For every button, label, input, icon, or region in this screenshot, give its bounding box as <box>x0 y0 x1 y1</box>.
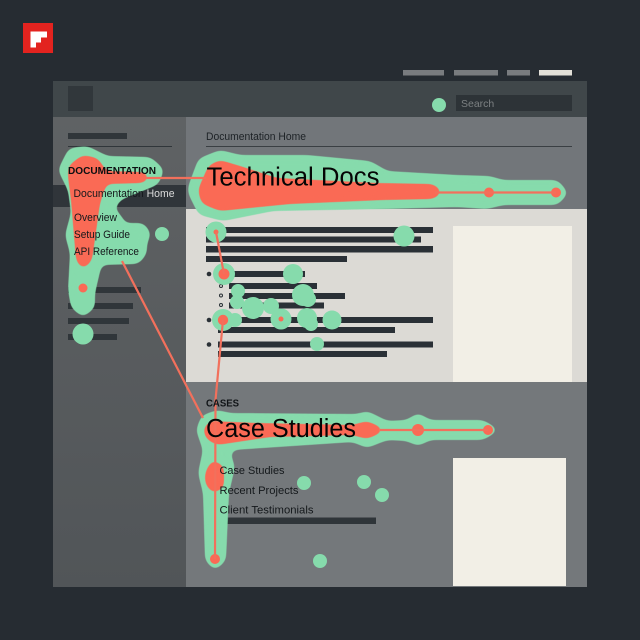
sidebar placeholder bars <box>68 133 172 340</box>
label: cases: CASES <box>206 398 239 410</box>
icon: flipboard logo <box>23 23 53 53</box>
search box <box>456 95 572 111</box>
cases links: Recent Projects <box>220 485 299 497</box>
header bar <box>53 81 587 117</box>
top navigation bars <box>403 70 572 76</box>
breadcrumb: Documentation Home <box>206 131 306 143</box>
content panel <box>186 209 587 382</box>
sidebar labels: API Reference <box>74 246 139 258</box>
heading: case studies: Case Studies <box>206 415 356 443</box>
cases links: Case Studies <box>220 465 285 477</box>
sidebar active band <box>53 185 186 207</box>
sidebar labels: Documentation Home <box>74 188 174 200</box>
sidebar labels <box>68 165 174 258</box>
heading: technical docs: Technical Docs <box>206 164 380 192</box>
body text bars <box>206 227 433 357</box>
site logo placeholder <box>68 86 93 111</box>
sidebar labels: Overview <box>74 212 117 224</box>
heatmap red hot zones <box>70 157 561 564</box>
cases links: Client Testimonials <box>220 504 314 516</box>
main hero panel <box>186 117 587 209</box>
cases image placeholder <box>453 458 566 586</box>
search box: Search <box>461 98 494 110</box>
sidebar labels: DOCUMENTATION <box>68 165 156 177</box>
cases bar <box>220 518 376 524</box>
website window <box>53 81 587 587</box>
sidebar panel <box>53 117 186 587</box>
cases links <box>220 465 314 516</box>
gaze path lines <box>122 178 556 559</box>
heatmap green areas <box>60 98 566 568</box>
sidebar labels: Setup Guide <box>74 229 130 241</box>
cases panel <box>186 382 587 587</box>
content image placeholder <box>453 226 572 382</box>
breadcrumb rule <box>206 146 572 147</box>
